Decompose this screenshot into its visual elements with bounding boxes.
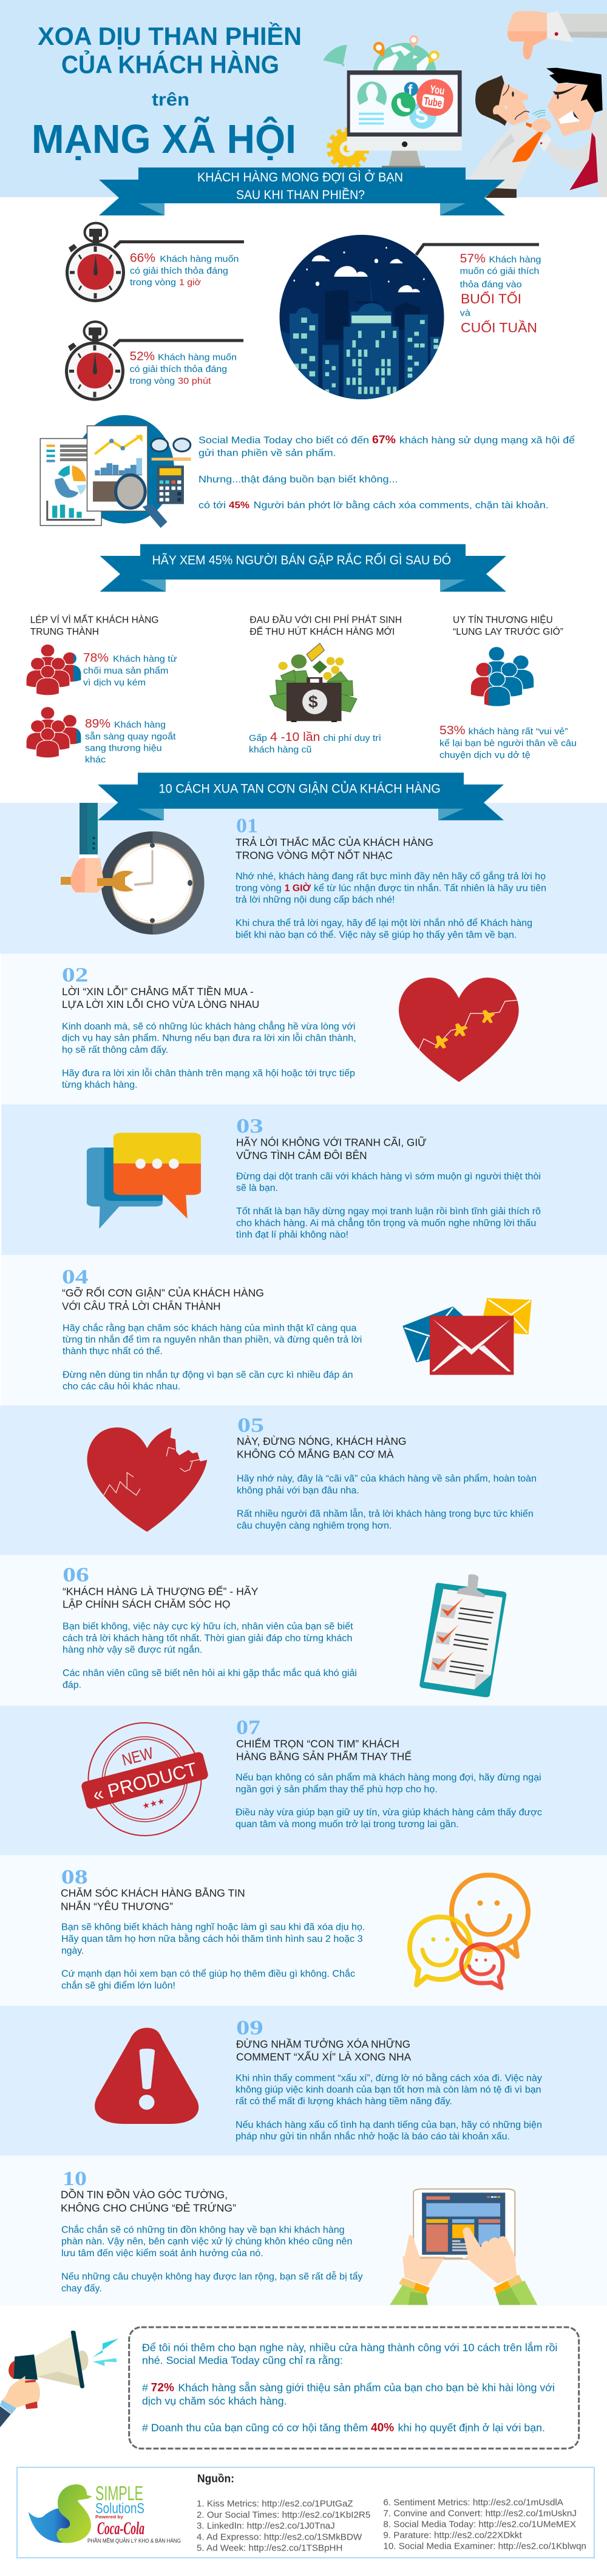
text — [236, 815, 546, 940]
text: 57%: thỏa đáng vào — [460, 279, 522, 289]
icon: computer monitor with social media icons — [347, 70, 462, 168]
text: kể từ lúc nhận được tin nhắn. Tất nhiên là hãy ưu tiên — [314, 883, 546, 893]
text: 78% — [83, 652, 177, 688]
text — [236, 1716, 542, 1830]
text: TRONG VÒNG MỘT NỐT NHẠC — [236, 848, 393, 861]
banner: 10 cách: 10 CÁCH XUA TAN CƠN GIẬN CỦA KHÁCH HÀNG — [159, 782, 441, 796]
text: chắn sẽ ghi điểm lớn luôn! — [61, 1981, 175, 1991]
icon: clipboard checklist — [419, 1574, 506, 1697]
sources list left: 3. LinkedIn: http://es2.co/1J0TnaJ — [197, 2521, 335, 2531]
text: 66%: 1 giờ — [179, 277, 201, 288]
text: NHẮN “YÊU THƯƠNG” — [61, 1899, 173, 1912]
text: KHÔNG CHO CHÚNG “ĐẺ TRỨNG” — [61, 2201, 236, 2214]
text: 52% — [130, 350, 237, 387]
text: pháp như gửi tin nhắn nhắc nhở hoặc là báo cáo tài khoản xấu. — [236, 2132, 510, 2142]
text: 04 — [62, 1266, 88, 1288]
text: “KHÁCH HÀNG LÀ THƯỢNG ĐẾ” - HÃY — [63, 1584, 259, 1597]
callout: statistics — [129, 2327, 579, 2449]
logo: Simple Solutions: SIMPLE — [95, 2482, 143, 2504]
icon: people 78% — [26, 644, 81, 695]
panel: tip 06 — [63, 1564, 506, 1697]
text: Social Media Today: có tới — [198, 501, 226, 511]
icon: new product stamp — [75, 1723, 213, 1836]
callout: statistics: # — [142, 2382, 148, 2394]
heading: LÉP VÍ VÌ MẤT KHÁCH HÀNG — [30, 614, 159, 626]
text: Chắc chắn sẽ có những tin đồn không hay về bạn khi khách hàng — [61, 2225, 345, 2235]
icon: stopwatch 66% — [67, 223, 244, 301]
text: Điều này vừa giúp bạn giữ uy tín, vừa giúp khách hàng cảm thấy được — [236, 1808, 542, 1818]
callout: statistics: 72% — [151, 2382, 174, 2395]
text: 52%: 30 phút — [178, 376, 212, 387]
text: Social Media Today: Người bán phớt lờ bằng cách xóa comments, chặn tài khoản. — [254, 499, 549, 511]
icon: smiley speech bubbles — [410, 1875, 528, 1988]
panel: tip 07 — [75, 1716, 542, 1836]
heading: TRUNG THÀNH — [30, 626, 99, 637]
text: 66%: Khách hàng muốn — [160, 254, 239, 265]
text: 66%: có giải thích thỏa đáng — [130, 266, 228, 276]
text: VỮNG TÌNH CẢM ĐÔI BÊN — [236, 1149, 367, 1161]
icon: warning triangle — [95, 2028, 198, 2124]
panel: tip 09 — [95, 2017, 542, 2142]
text: 4-10 lần: Gấp — [249, 733, 267, 743]
logo: Simple Solutions: Powered by — [95, 2514, 124, 2520]
sources list left: 1. Kiss Metrics: http://es2.co/1PUtGaZ — [197, 2499, 353, 2509]
text: Đừng nên dùng tin nhắn tự động vì bạn sẽ cần cực kì nhiều đáp án — [63, 1370, 353, 1380]
skype icon: S — [415, 105, 429, 127]
banner: 45% người bán: HÃY XEM 45% NGƯỜI BÁN GẶP RẮC RỐI GÌ SAU ĐÓ — [152, 553, 451, 567]
text: 57%: 57% — [460, 252, 486, 265]
text: Khi nhìn thấy comment “xấu xí”, đừng lờ nó bằng cách xóa đi. Việc này — [236, 2073, 542, 2083]
title — [32, 22, 302, 162]
text — [62, 1266, 362, 1392]
text: Social Media Today: Social Media Today cho biết có đến — [198, 436, 369, 446]
icon: people 53% — [470, 646, 534, 706]
panel: tip 03 — [87, 1115, 541, 1240]
text: Social Media Today: gửi than phiền về sản phẩm. — [198, 448, 336, 459]
text: 66% — [130, 252, 239, 288]
text: Hãy nhớ này, đây là “cãi vã” của khách hàng về sản phẩm, hoàn toàn — [237, 1474, 537, 1484]
text: HÃY NÓI KHÔNG VỚI TRANH CÃI, GIỮ — [236, 1135, 427, 1148]
icon: chat bubbles — [87, 1133, 201, 1229]
text: 4-10 lần: chi phí duy trì — [323, 733, 381, 743]
text: Khi chưa thể trả lời ngay, hãy để lại một lời nhắn nhỏ để Khách hàng — [236, 918, 532, 928]
dollar sign: $ — [308, 692, 318, 711]
text: lưu tâm đến việc kiểm soát ảnh hưởng của nó. — [61, 2248, 263, 2259]
text: TRẢ LỜI THẮC MẮC CỦA KHÁCH HÀNG — [236, 836, 433, 848]
column: lost customers — [26, 614, 177, 765]
text: COMMENT “XẤU XÍ” LÀ XONG NHA — [236, 2050, 412, 2063]
banner: khách hàng mong đợi gì — [99, 167, 505, 215]
text: ngày. — [61, 1946, 84, 1956]
icon: globe with pins — [373, 35, 439, 107]
icon: new product stamp: « PRODUCT — [90, 1758, 199, 1806]
title: MẠNG XÃ HỘI — [32, 117, 296, 162]
text: Hãy đưa ra lời xin lỗi chân thành trên mạng xã hội hoặc tới trực tiếp — [62, 1068, 355, 1078]
illustration: frightened man — [468, 75, 551, 198]
text: 53%: kể lại bạn bè người thân về câu — [439, 739, 577, 749]
sources list right: 9. Parature: http://es2.co/22XDkkt — [383, 2530, 523, 2541]
heading: “LUNG LAY TRƯỚC GIÓ” — [453, 626, 563, 637]
logo: Simple Solutions: Coca-Cola — [97, 2518, 144, 2538]
text: DỒN TIN ĐỒN VÀO GÓC TƯỜNG, — [61, 2188, 228, 2201]
text: 4-10 lần: 4 -10 lần — [270, 731, 320, 744]
text: 89% — [85, 717, 176, 765]
text: Social Media Today: Nhưng...thật đáng buồn bạn biết không... — [198, 475, 398, 485]
text: 07 — [236, 1716, 260, 1739]
panel: tip 02 — [62, 964, 519, 1090]
sources list left: 4. Ad Expresso: http://es2.co/1SMkBDW — [197, 2532, 362, 2542]
illustration: angry man — [532, 68, 607, 197]
text: Social Media Today: 67% — [372, 434, 396, 446]
text: 01 — [236, 815, 258, 837]
text — [236, 1115, 541, 1240]
text: 09 — [236, 2017, 263, 2039]
text: thành thực nhất có thể. — [63, 1347, 163, 1357]
sources list right: 10. Social Media Examiner: http://es2.co/1Kblwqn — [383, 2541, 586, 2552]
text — [61, 2168, 363, 2294]
text: 52%: trong vòng — [130, 376, 175, 387]
text: chay đấy. — [61, 2284, 102, 2294]
heading — [453, 614, 563, 637]
text: Hãy chắc rằng bạn chăm sóc khách hàng của mình thật kĩ càng qua — [63, 1323, 357, 1333]
text: “GỠ RỐI CƠN GIẬN” CỦA KHÁCH HÀNG — [62, 1286, 264, 1299]
text: 89%: 89% — [85, 717, 110, 731]
text: rất có thể mất đi lượng khách hàng tiềm năng đấy. — [236, 2097, 452, 2107]
facebook icon — [404, 82, 418, 98]
text: quan tâm và mong muốn trở lại trong tương lai gần. — [236, 1819, 459, 1830]
title: trên — [152, 90, 189, 110]
logo: Simple Solutions: SolutionS — [95, 2501, 144, 2517]
banner: khách hàng mong đợi gì: SAU KHI THAN PHIỀN? — [236, 188, 365, 202]
icon: thumbs down — [507, 11, 607, 59]
text: Nếu những câu chuyện không hay được lan rộng, bạn sẽ rất dễ bị tẩy — [61, 2272, 363, 2282]
logo: Simple Solutions: PHẦN MỀM QUẢN LÝ KHO & BÁN HÀNG — [87, 2537, 181, 2544]
heading: ĐỂ THU HÚT KHÁCH HÀNG MỚI — [249, 626, 395, 637]
text: 57%: và — [460, 308, 471, 319]
text: Nhớ nhé, khách hàng đang rất bực mình đầy nên hãy cố gắng trả lời họ — [236, 871, 546, 882]
callout: statistics: # Doanh thu của bạn cũng có cơ hội tăng thêm — [142, 2422, 368, 2434]
text: LỜI “XIN LỖI” CHẲNG MẤT TIỀN MUA - — [62, 985, 254, 998]
callout: statistics: Khách hàng sẵn sàng giới thiệu sản phẩm của bạn cho bạn bè khi hài lòng với — [178, 2382, 555, 2394]
title: XOA DỊU THAN PHIỀN — [38, 22, 302, 50]
text: Hãy quan tâm họ hơn nữa bằng cách hỏi thăm tình hình sau 2 hoặc 3 — [61, 1934, 363, 1944]
text: biết khi nào bạn có thể. Việc này sẽ giúp họ thấy yên tâm về bạn. — [236, 930, 517, 940]
text: từng khách hàng. — [62, 1080, 137, 1090]
callout: statistics: khi họ quyết định ở lại với bạn. — [398, 2422, 545, 2434]
heading — [249, 614, 402, 637]
icon: megaphone — [0, 2331, 119, 2427]
text: 10 — [63, 2168, 87, 2190]
icon: new product stamp: ★★★ — [141, 1796, 166, 1811]
banner: khách hàng mong đợi gì: KHÁCH HÀNG MONG ĐỢI GÌ Ở BẠN — [197, 170, 403, 184]
youtube icon: You — [429, 83, 446, 97]
text: 52%: 52% — [130, 350, 155, 363]
text: Social Media Today — [198, 434, 575, 511]
text: ngần gợi ý sản phẩm thay thế phù hợp cho họ. — [236, 1784, 438, 1794]
text: 57%: BUỔI TỐI — [461, 291, 521, 306]
text: Social Media Today: khách hàng sử dụng mạng xã hội để — [399, 435, 575, 446]
text: HÀNG BẰNG SẢN PHẨM THAY THẾ — [236, 1750, 412, 1763]
text: Nếu khách hàng xấu cố tình hạ danh tiếng của bạn, hãy có những biện — [236, 2120, 542, 2130]
text: Bạn sẽ không biết khách hàng nghĩ hoặc làm gì sau khi đã xóa dịu họ. — [61, 1922, 365, 1933]
text: Nếu bạn không có sản phẩm mà khách hàng mong đợi, hãy đừng ngại — [236, 1773, 541, 1783]
heading — [30, 614, 159, 637]
illustration: reports with charts and magnifier — [40, 415, 191, 528]
text: VỚI CÂU TRẢ LỜI CHÂN THÀNH — [62, 1299, 221, 1312]
heading: sources: Nguồn: — [197, 2473, 234, 2485]
text: câu chuyện càng nghiêm trọng hơn. — [237, 1521, 392, 1531]
text: 78%: 78% — [83, 652, 109, 665]
text: 53%: khách hàng rất “vui vẻ” — [469, 726, 568, 737]
text: 57% — [460, 252, 541, 336]
sources list left: 5. Ad Week: http://es2.co/1TSBpHH — [197, 2543, 342, 2553]
text: 53%: chuyện dịch vụ dở tệ — [439, 750, 531, 760]
text: KHÔNG CÓ MẮNG BẠN CƠ MÀ — [237, 1447, 394, 1460]
text: trả lời những nội dung cấp bách nhé! — [236, 895, 395, 905]
icon: mint sector — [323, 45, 347, 66]
phone icon — [392, 92, 416, 117]
sources list right: 7. Convine and Convert: http://es2.co/1mUsknJ — [383, 2508, 577, 2518]
panel: tip 10 — [61, 2168, 537, 2305]
sources list right — [383, 2497, 586, 2552]
text: trong vòng — [236, 883, 282, 893]
callout: statistics: 40% — [371, 2422, 394, 2435]
title: CỦA KHÁCH HÀNG — [61, 50, 279, 79]
text: họ sẽ rất thông cảm đấy. — [62, 1045, 168, 1055]
text: 57%: CUỐI TUẦN — [461, 320, 537, 336]
text — [61, 1866, 365, 1991]
text: 53% — [439, 724, 577, 760]
panel: tip 05 — [87, 1414, 537, 1532]
skype icon — [409, 102, 436, 129]
text: 02 — [62, 964, 88, 987]
text — [236, 2017, 542, 2142]
banner: 10 cách — [98, 772, 504, 820]
text: Đừng dại dột tranh cãi với khách hàng vì sớm muộn gì người thiệt thòi — [236, 1171, 541, 1182]
text: Cứ mạnh dạn hỏi xem bạn có thể giúp họ thêm điều gì không. Chắc — [61, 1969, 355, 1979]
text: dịch vụ hay sản phẩm. Nhưng nếu bạn đưa ra lời xin lỗi chân thành, — [62, 1033, 356, 1044]
text: 4-10 lần: khách hàng cũ — [249, 745, 311, 755]
icon: new product stamp: NEW — [120, 1744, 155, 1770]
sources list right: 8. Social Media Today: http://es2.co/1UMeMEX — [383, 2519, 576, 2529]
illustration: night city — [279, 235, 539, 401]
text: 89%: khác — [85, 755, 106, 765]
icon: envelopes — [402, 1298, 532, 1375]
text: 89%: Khách hàng — [114, 720, 166, 730]
youtube icon: Tube — [423, 94, 443, 109]
text: 05 — [237, 1414, 264, 1436]
text: CHĂM SÓC KHÁCH HÀNG BẰNG TIN — [61, 1887, 245, 1899]
text: Rất nhiều người đã nhầm lẫn, trả lời khách hàng trong bực tức khiến — [237, 1509, 534, 1519]
text: LẬP CHÍNH SÁCH CHĂM SÓC HỌ — [63, 1597, 231, 1610]
icon: tablet held by hands — [390, 2189, 537, 2305]
text: CHIẾM TRỌN “CON TIM” KHÁCH — [236, 1737, 399, 1749]
text: cách trả lời khách hàng tốt nhất. Thời gian giải đáp cho từng khách — [63, 1633, 352, 1643]
text: 78%: vì dịch vụ kém — [83, 677, 146, 688]
text — [63, 1564, 357, 1690]
text: 06 — [63, 1564, 89, 1586]
profile avatar — [358, 81, 387, 124]
text: phàn nàn. Vậy nên, bên cạnh việc xử lý chúng khôn khéo cũng nên — [61, 2237, 352, 2247]
illustration: header art — [323, 11, 607, 198]
youtube icon — [416, 79, 453, 116]
text: 57%: Khách hàng — [489, 254, 541, 265]
text: 66%: 66% — [130, 252, 155, 265]
callout: statistics: nhé. Social Media Today cũng chỉ ra rằng: — [142, 2354, 343, 2367]
text: NÀY, ĐỪNG NÓNG, KHÁCH HÀNG — [237, 1435, 407, 1447]
text: 66%: trong vòng — [130, 277, 176, 288]
text: tình đạt lí phải không nào! — [236, 1230, 348, 1240]
text — [62, 964, 356, 1090]
sources list left: 2. Our Social Times: http://es2.co/1KbI2R5 — [197, 2510, 370, 2520]
column: extra costs — [249, 614, 402, 755]
text: 78%: chối mua sản phẩm — [83, 666, 168, 676]
panel backgrounds: tips — [0, 803, 607, 2305]
panel: tip 01 — [61, 803, 546, 940]
panel: sources — [17, 2467, 594, 2558]
text: không phải với bạn đâu nha. — [237, 1486, 359, 1496]
text: 52%: Khách hàng muốn — [158, 352, 237, 362]
heading: UY TÍN THƯƠNG HIỆU — [453, 614, 553, 626]
facebook icon: f — [408, 82, 413, 98]
text: cho khách hàng. Ai mà chẳng tôn trọng và muốn nghe những lời thấu — [236, 1217, 536, 1228]
text: cho các câu hỏi khác nhau. — [63, 1382, 180, 1392]
text: 03 — [236, 1115, 263, 1138]
text: 1 GIỜ — [285, 882, 311, 893]
text: Kinh doanh mà, sẽ có những lúc khách hàng chẳng hề vừa lòng với — [62, 1021, 356, 1032]
callout: statistics: dịch vụ chăm sóc khách hàng. — [142, 2395, 287, 2407]
heading: ĐAU ĐẦU VỚI CHI PHÍ PHÁT SINH — [249, 614, 402, 626]
text: hàng nhờ vậy sẽ được rút ngắn. — [63, 1645, 203, 1655]
sources list left — [197, 2499, 370, 2553]
text: không giúp việc kinh doanh của bạn tốt hơn mà còn làm nó tệ đi vì bạn — [236, 2085, 541, 2095]
icon: briefcase of money — [270, 643, 357, 722]
text: đáp. — [63, 1680, 81, 1690]
header background — [0, 0, 607, 197]
icon: people 89% — [26, 706, 81, 758]
text: 52%: có giải thích thỏa đáng — [130, 364, 227, 374]
banner: 45% người bán — [100, 544, 506, 592]
column: brand reputation — [439, 614, 577, 760]
icon: clock with wrench — [61, 803, 204, 935]
text: sẽ là bạn. — [236, 1183, 278, 1194]
text: 78%: Khách hàng từ — [113, 654, 177, 664]
text: ĐỪNG NHẦM TƯỞNG XÓA NHỮNG — [236, 2037, 410, 2050]
text: 57%: muốn có giải thích — [460, 266, 539, 277]
sources list right: 6. Sentiment Metrics: http://es2.co/1mUsdlA — [383, 2497, 563, 2507]
panel: tip 04 — [62, 1266, 532, 1392]
text — [237, 1414, 537, 1531]
text: Tốt nhất là bạn hãy dừng ngay mọi tranh luận rồi bình tĩnh giải thích rõ — [236, 1206, 541, 1217]
text: 08 — [61, 1866, 88, 1888]
icon: gear — [329, 130, 367, 167]
text: 4-10 lần — [249, 731, 381, 755]
text: Bạn biết không, việc này cực kỳ hữu ích, nhân viên của bạn sẽ biết — [63, 1621, 353, 1632]
text: 89%: sang thương hiệu — [85, 743, 162, 754]
text: LỰA LỜI XIN LỖI CHO VỪA LÒNG NHAU — [62, 998, 259, 1010]
icon: stopwatch 52% — [67, 322, 243, 399]
panel: tip 08 — [61, 1866, 528, 1991]
icon: mended heart — [399, 978, 519, 1082]
text: 53%: 53% — [439, 724, 466, 737]
icon: broken heart — [87, 1427, 207, 1532]
text: 89%: sẵn sàng quay ngoắt — [85, 731, 176, 742]
logo: Simple Solutions — [29, 2482, 181, 2544]
text: từng tin nhắn để tìm ra nguyên nhân than phiền, và đừng quên trả lời — [63, 1335, 362, 1345]
text: Social Media Today: 45% — [229, 501, 249, 511]
text: Các nhân viên cũng sẽ biết nên hỏi ai khi gặp thắc mắc quá khó giải — [63, 1668, 357, 1678]
callout: statistics: Để tôi nói thêm cho bạn nghe này, nhiều cửa hàng thành công với 10 cách trên lắm rồi — [142, 2341, 557, 2353]
